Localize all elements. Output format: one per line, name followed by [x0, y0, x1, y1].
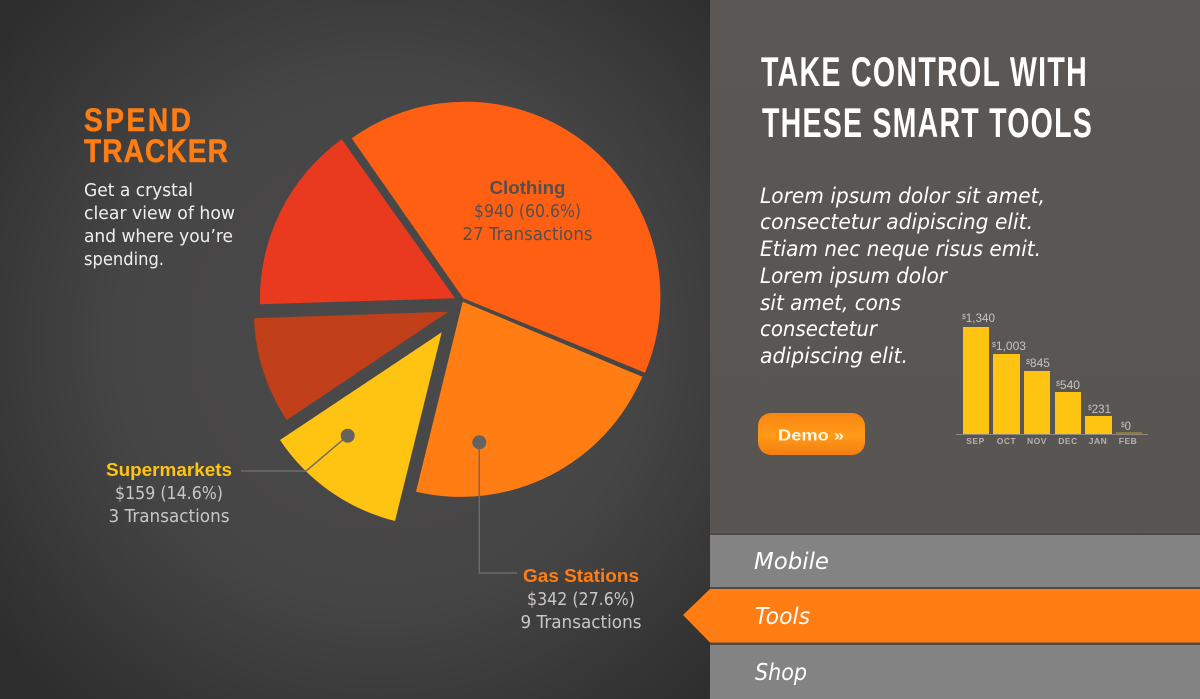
month labels [966, 436, 1137, 446]
panel: dark left background [0, 0, 710, 699]
bar value labels: 0 [1125, 419, 1131, 433]
month labels: DEC [1058, 436, 1078, 446]
label: supermarkets [106, 460, 232, 527]
month labels: FEB [1119, 436, 1137, 446]
text block: lorem ipsum: consectetur [760, 317, 878, 341]
bar value labels: $ [962, 314, 966, 321]
text block: lorem ipsum: consectetur adipiscing elit. [760, 210, 1033, 234]
label: supermarkets: $159 (14.6%) [115, 484, 223, 504]
nav item: mobile [710, 535, 1200, 587]
text block: lorem ipsum [760, 184, 1045, 368]
slice: dark red category [254, 312, 448, 420]
month labels: JAN [1089, 436, 1107, 446]
nav item: tools (active): Tools [755, 602, 810, 630]
text block: spend tracker intro: spending. [84, 249, 164, 270]
button: demo [758, 413, 865, 455]
bar value labels: $ [992, 342, 996, 349]
slice: supermarkets [280, 332, 442, 521]
label: gas stations: Gas Stations [523, 566, 639, 586]
title: take control: TAKE CONTROL WITH [761, 47, 1087, 95]
bar value labels: 1,003 [996, 339, 1026, 353]
bar value labels: 845 [1030, 356, 1050, 370]
text block: spend tracker intro: and where you’re [84, 226, 233, 247]
slice: gas stations [416, 302, 642, 497]
month labels: OCT [997, 436, 1017, 446]
text block: lorem ipsum: Lorem ipsum dolor [760, 264, 948, 288]
text block: spend tracker intro: clear view of how [84, 203, 235, 224]
month labels: NOV [1027, 436, 1047, 446]
bar value labels: 540 [1060, 378, 1080, 392]
title: take control [761, 47, 1092, 146]
label: clothing: $940 (60.6%) [474, 202, 581, 222]
leader line: supermarkets [241, 429, 355, 471]
text block: spend tracker intro [84, 180, 235, 270]
label: clothing: Clothing [490, 178, 566, 198]
bar value labels: $ [1056, 381, 1060, 388]
slice: red category [260, 139, 455, 304]
text block: spend tracker intro: Get a crystal [84, 180, 193, 201]
axis [956, 434, 1148, 435]
text block: lorem ipsum: Etiam nec neque risus emit. [760, 237, 1041, 261]
text block: lorem ipsum: adipiscing elit. [760, 344, 908, 368]
nav item: mobile: Mobile [754, 547, 829, 575]
label: clothing: 27 Transactions [462, 225, 592, 245]
nav item: shop [710, 645, 1200, 699]
pie chart: spending by category [254, 102, 660, 521]
bar value labels: $ [1026, 359, 1030, 366]
bar value labels [962, 311, 1131, 433]
heading: spend tracker [84, 103, 228, 169]
bar value labels: 1,340 [966, 311, 995, 325]
text block: lorem ipsum: sit amet, cons [760, 291, 901, 315]
bar value labels: $ [1121, 422, 1125, 429]
leader line: gas stations [472, 435, 517, 573]
bars [963, 327, 1112, 434]
title: take control: THESE SMART TOOLS [762, 98, 1092, 146]
button: demo: Demo » [778, 428, 844, 444]
text block: lorem ipsum: Lorem ipsum dolor sit amet, [760, 184, 1045, 208]
label: clothing [462, 178, 592, 245]
bar value labels: 231 [1092, 402, 1111, 416]
nav item: shop: Shop [755, 658, 807, 686]
label: gas stations: $342 (27.6%) [527, 590, 635, 610]
heading: spend tracker: TRACKER [84, 134, 228, 169]
heading: spend tracker: SPEND [84, 103, 191, 138]
label: supermarkets: Supermarkets [106, 460, 232, 480]
label: gas stations [520, 566, 642, 633]
nav item: tools (active) [683, 589, 1200, 642]
bar chart: monthly spend [956, 311, 1148, 446]
slice: clothing [352, 102, 660, 373]
label: supermarkets: 3 Transactions [108, 507, 230, 527]
label: gas stations: 9 Transactions [520, 613, 642, 633]
bar value labels: $ [1088, 405, 1092, 412]
navigation menu [683, 533, 1200, 699]
panel: right background [710, 0, 1200, 699]
month labels: SEP [966, 436, 985, 446]
